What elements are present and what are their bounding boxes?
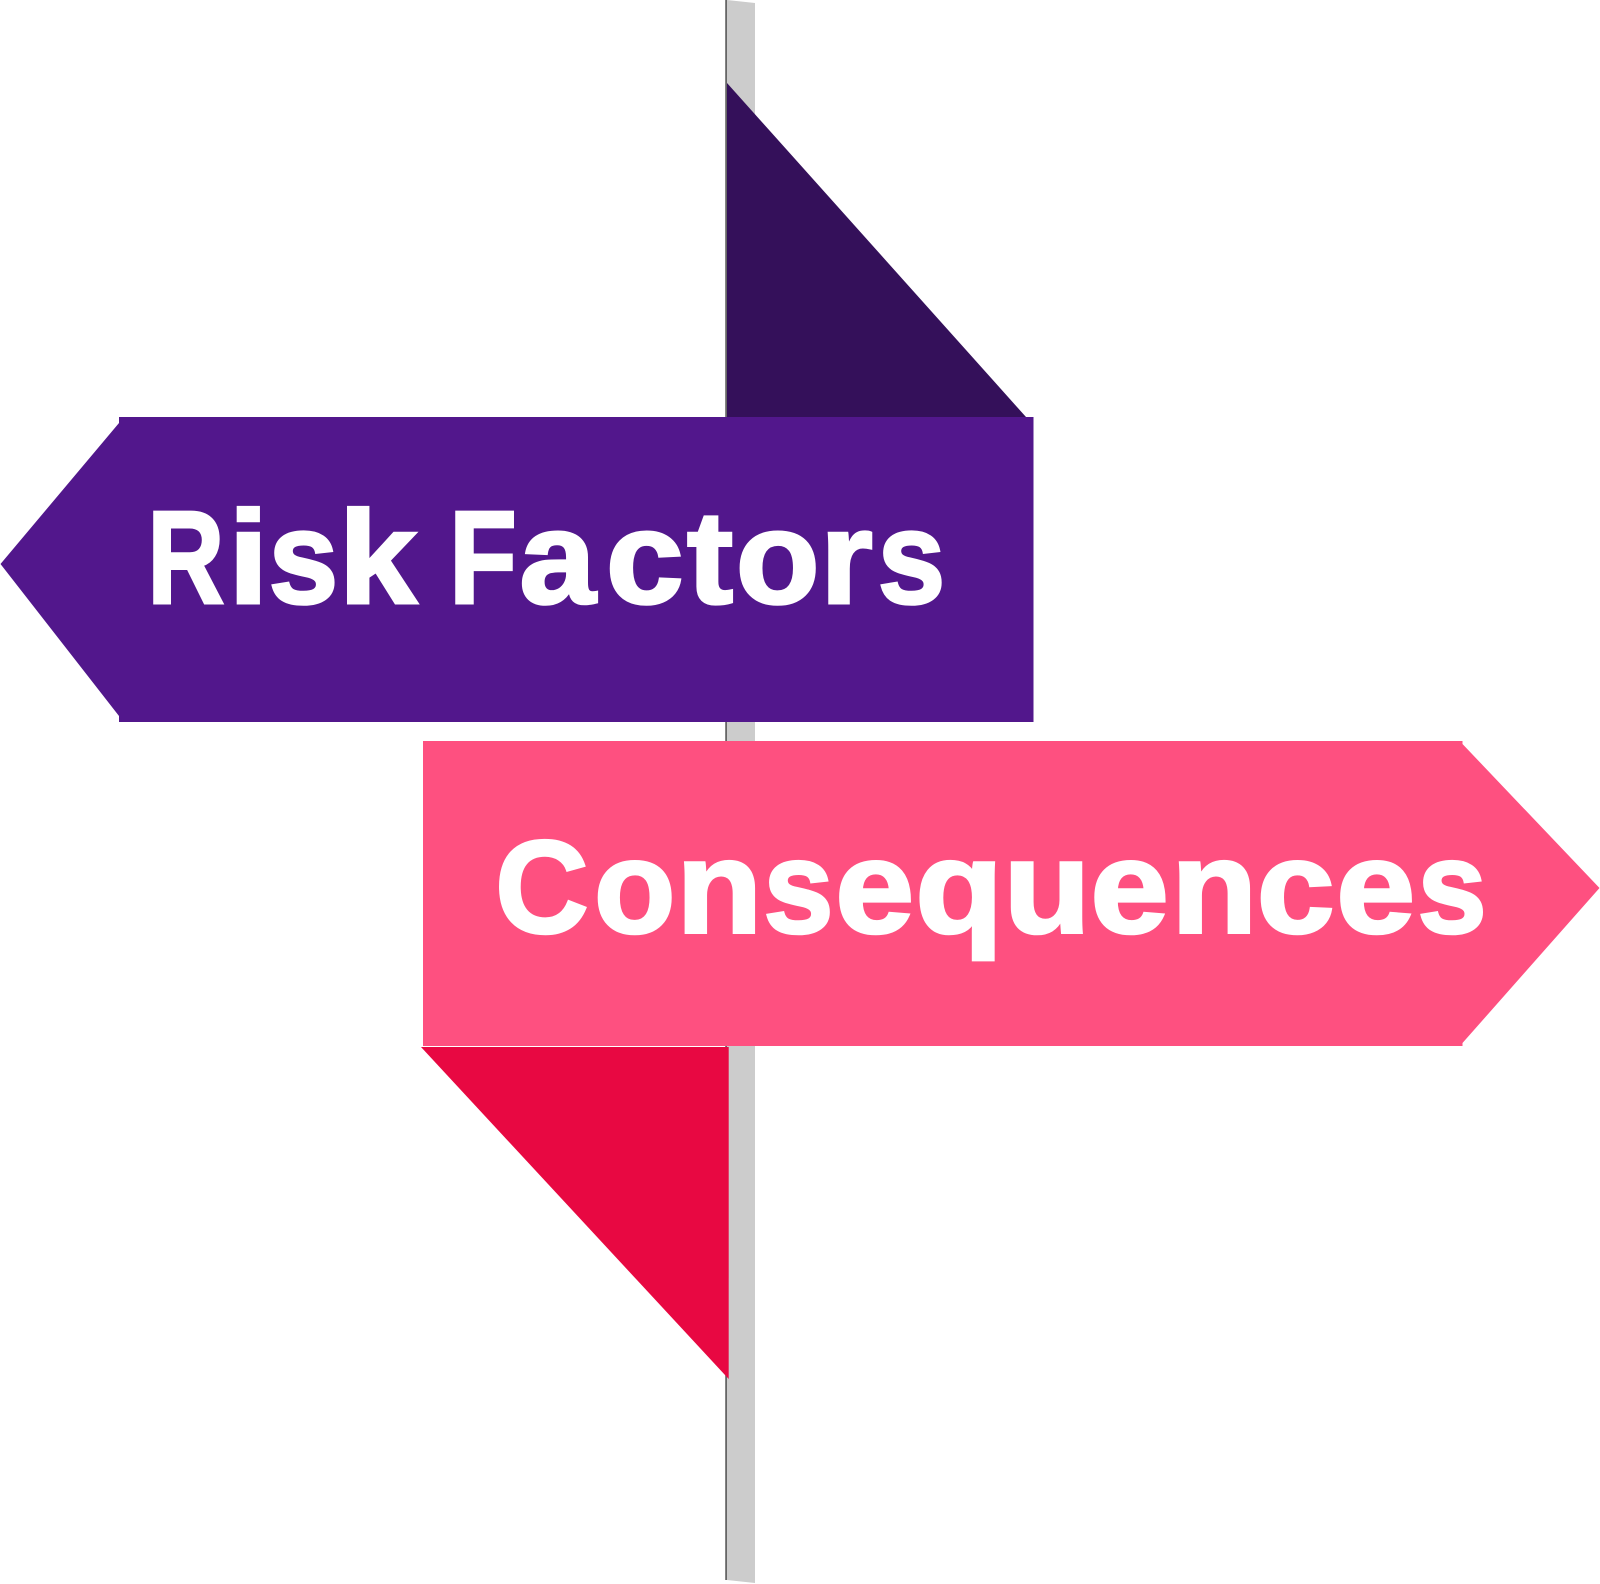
heading: consequences: o [594,814,675,960]
heading: risk factors: R [147,484,224,631]
heading: risk factors: a [519,484,597,631]
heading: consequences: e [1336,814,1415,960]
pole [725,0,755,1583]
heading: consequences: e [835,814,914,960]
heading: consequences: C [495,814,589,960]
heading: consequences: q [915,814,1003,960]
heading: consequences: s [763,814,834,960]
heading: risk factors: t [687,484,733,631]
heading: risk factors: c [606,484,684,631]
purple arrow panel pointing left [0,417,1034,722]
red flag triangle [421,1047,729,1379]
heading: risk factors: F [449,484,517,631]
heading: risk factors: i [228,484,269,631]
heading: consequences: n [1171,814,1257,960]
heading: risk factors: o [736,484,820,631]
heading: consequences: u [1004,814,1091,960]
heading: consequences: e [1090,814,1169,960]
sign: risk factors [0,417,1034,722]
heading: risk factors: r [820,484,873,631]
heading: risk factors: s [269,484,338,631]
heading: risk factors: s [878,484,945,631]
heading: consequences: s [1418,814,1487,960]
pink arrow panel pointing right [423,741,1600,1046]
heading: risk factors: k [339,484,417,631]
dark purple flag triangle [727,83,1026,417]
heading: consequences: c [1257,814,1335,960]
heading: consequences: n [676,814,762,960]
sign: consequences [423,741,1600,1046]
